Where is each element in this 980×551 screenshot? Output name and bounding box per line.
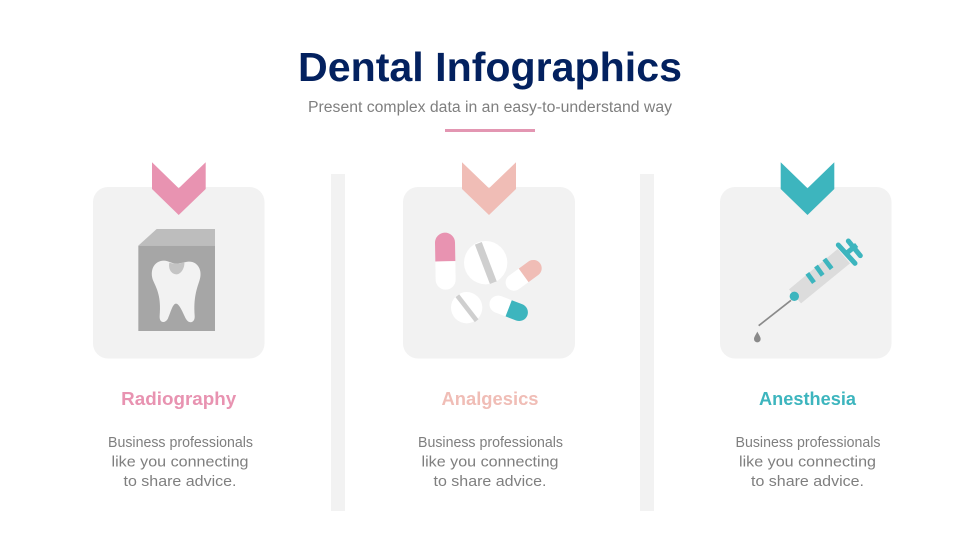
card background xyxy=(403,187,575,358)
description: to share advice. xyxy=(751,474,864,490)
chevron marker xyxy=(152,162,206,215)
description xyxy=(736,435,880,490)
icon: syringe xyxy=(754,241,860,342)
description: like you connecting xyxy=(112,454,248,470)
description xyxy=(418,435,563,490)
description: Business professionals xyxy=(108,435,253,451)
title underline xyxy=(445,129,535,132)
title: Dental Infographics xyxy=(298,44,682,90)
description: Business professionals xyxy=(418,435,563,451)
heading: anesthesia: Anesthesia xyxy=(759,388,857,409)
panel: analgesics xyxy=(403,162,575,490)
description: to share advice. xyxy=(434,474,546,490)
description xyxy=(108,435,253,490)
description: like you connecting xyxy=(739,454,876,470)
icon: x-ray tooth xyxy=(138,229,215,331)
icon: pills xyxy=(435,232,545,324)
panel: radiography xyxy=(93,162,264,490)
subtitle: Present complex data in an easy-to-understand way xyxy=(308,99,672,116)
column divider right xyxy=(640,174,654,511)
chevron marker xyxy=(462,162,516,215)
description: like you connecting xyxy=(422,454,558,470)
heading: radiography: Radiography xyxy=(121,388,237,409)
chevron marker xyxy=(781,162,834,215)
column divider left xyxy=(331,174,345,511)
description: to share advice. xyxy=(124,474,236,490)
card background xyxy=(93,187,264,358)
card background xyxy=(720,187,892,358)
panel: anesthesia xyxy=(720,162,892,490)
description: Business professionals xyxy=(736,435,880,451)
heading: analgesics: Analgesics xyxy=(442,388,538,409)
